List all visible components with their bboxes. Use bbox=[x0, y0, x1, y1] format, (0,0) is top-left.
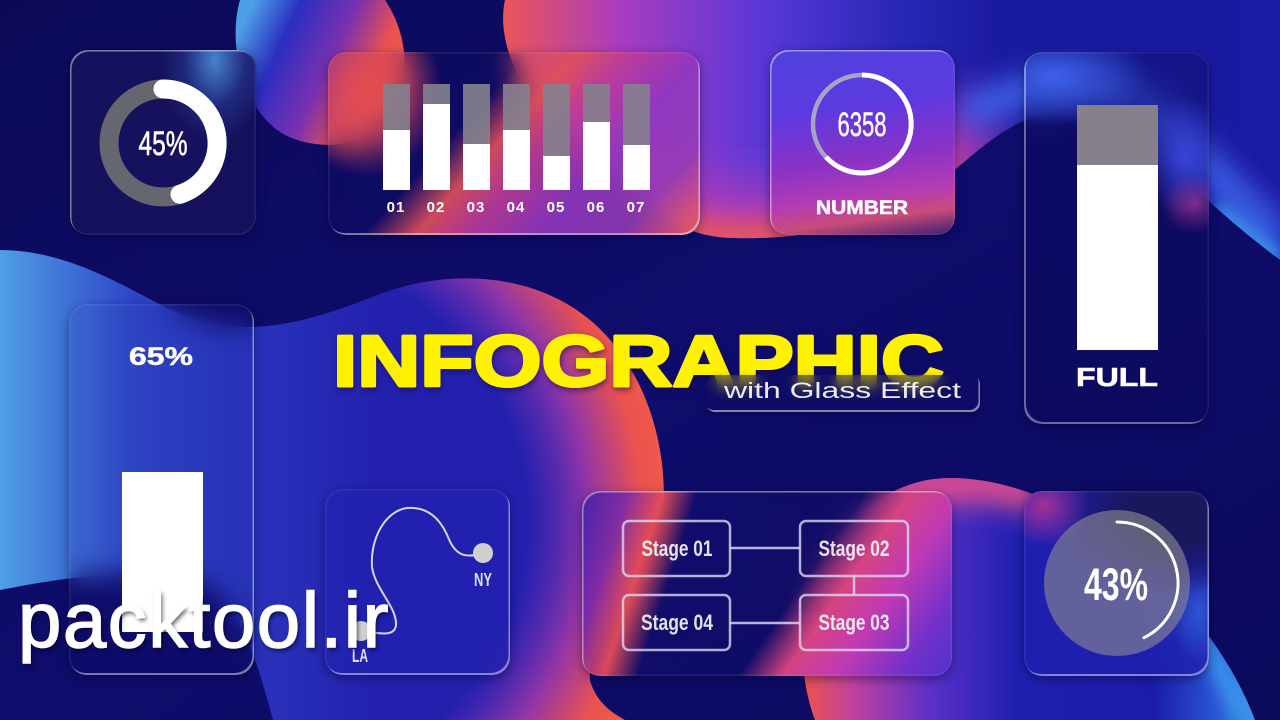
bar labels: 02 bbox=[427, 199, 445, 216]
radial arc bbox=[1117, 522, 1178, 638]
stage 02: Stage 02 bbox=[818, 536, 890, 561]
subtitle text: with Glass Effect bbox=[723, 378, 961, 403]
vertical bar bbox=[122, 472, 203, 632]
bars bbox=[383, 84, 650, 190]
panel: stage flow bbox=[582, 491, 952, 676]
route line bbox=[365, 508, 483, 633]
panel: bar chart bbox=[328, 52, 700, 235]
stage 01 bbox=[623, 521, 730, 576]
bar labels: 01 bbox=[387, 199, 405, 216]
bottom-right blob bbox=[802, 478, 1255, 720]
stage 04: Stage 04 bbox=[641, 610, 714, 635]
panel: number gauge bbox=[770, 50, 955, 235]
panel: 45% donut bbox=[70, 50, 256, 235]
title: INFOGRAPHIC bbox=[333, 322, 944, 402]
donut value: 45% bbox=[138, 125, 188, 163]
middle-left blob bbox=[0, 250, 664, 720]
panel: route map bbox=[325, 489, 510, 675]
connectors bbox=[730, 548, 854, 623]
bar label: FULL bbox=[1076, 362, 1158, 392]
subtitle pill bbox=[706, 375, 980, 412]
gauge value: 6358 bbox=[838, 106, 886, 144]
bar value: 65% bbox=[129, 343, 193, 371]
bar labels: 03 bbox=[467, 199, 485, 216]
bar labels: 06 bbox=[587, 199, 605, 216]
gauge label: NUMBER bbox=[816, 198, 908, 219]
donut chart bbox=[109, 89, 217, 197]
origin point NY bbox=[473, 543, 493, 590]
stage 04 bbox=[623, 595, 730, 650]
panel: full bar bbox=[1024, 52, 1209, 424]
bar labels bbox=[387, 199, 645, 216]
bar labels: 05 bbox=[547, 199, 565, 216]
ring gauge bbox=[813, 75, 911, 173]
origin point NY: NY bbox=[474, 570, 492, 590]
destination point LA: LA bbox=[352, 646, 368, 666]
stage 03 bbox=[800, 595, 908, 650]
radial value: 43% bbox=[1084, 559, 1148, 610]
panel: 43% radial bbox=[1024, 491, 1209, 676]
watermark: packtool.ir bbox=[18, 576, 390, 664]
stage 03: Stage 03 bbox=[818, 610, 890, 635]
destination point LA bbox=[351, 621, 371, 666]
radial disc bbox=[1044, 510, 1190, 656]
vertical bar bbox=[1077, 105, 1158, 350]
panel: 65% bar bbox=[69, 304, 254, 675]
stage 01: Stage 01 bbox=[642, 536, 712, 561]
stage 02 bbox=[800, 521, 908, 576]
bar labels: 04 bbox=[507, 199, 525, 216]
bar labels: 07 bbox=[627, 199, 645, 216]
top blob bbox=[503, 0, 1280, 262]
top-left blob bbox=[236, 0, 405, 145]
